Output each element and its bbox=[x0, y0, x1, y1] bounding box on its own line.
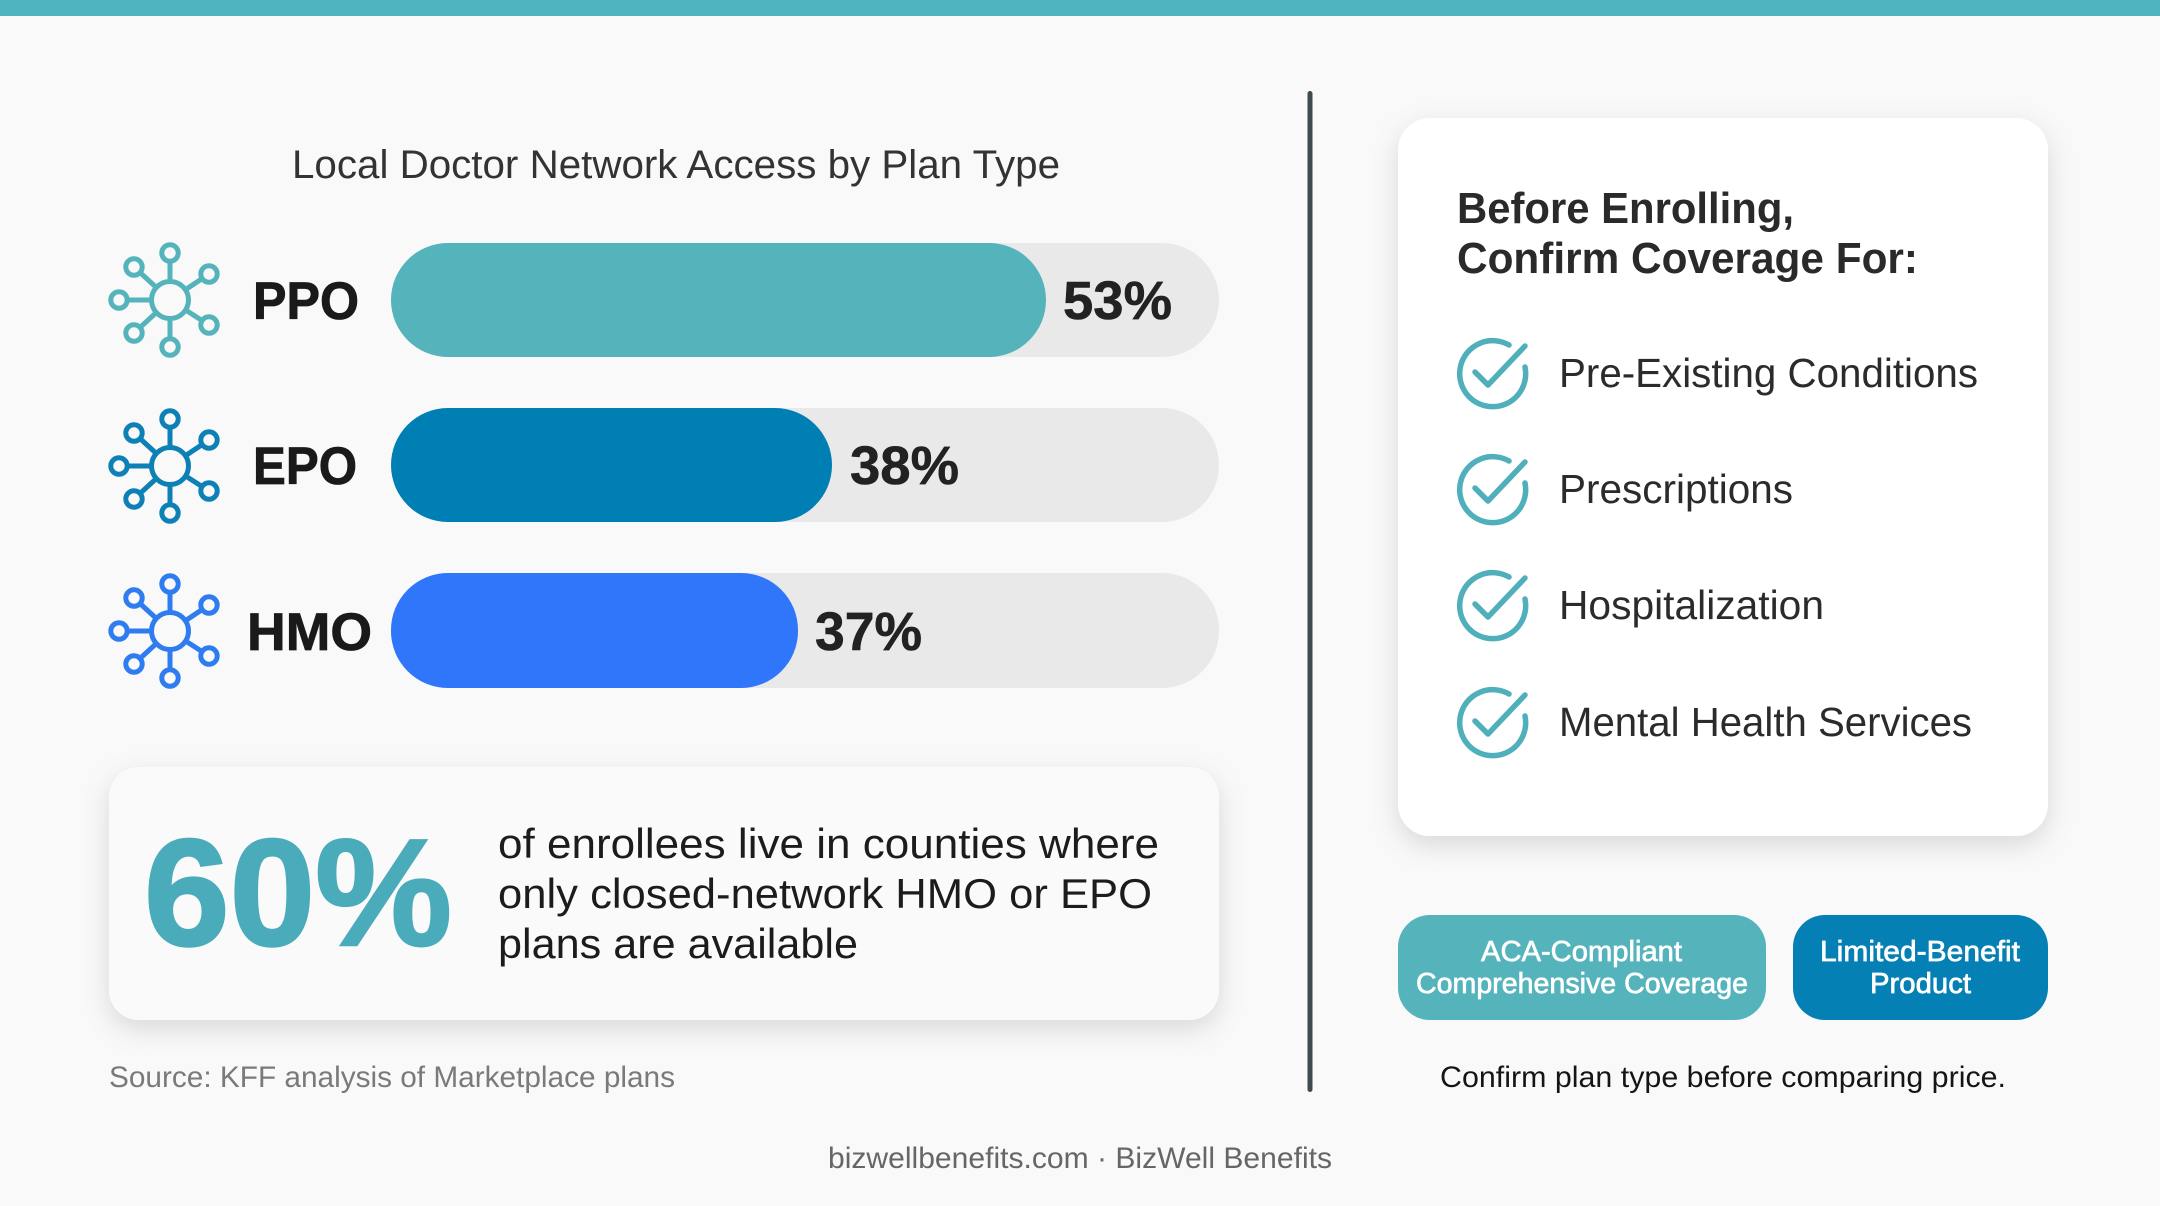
callout text: of enrollees live in counties where bbox=[498, 820, 1159, 867]
badge: ACA-compliant bbox=[1398, 915, 1766, 1020]
reminder note: Confirm plan type before comparing price. bbox=[1440, 1061, 2006, 1094]
row: HMO bbox=[111, 573, 1219, 688]
panel heading: Confirm Coverage For: bbox=[1457, 234, 1918, 283]
badge text bbox=[1416, 936, 1748, 1000]
icon: HMO network bbox=[111, 576, 217, 686]
item: Hospitalization bbox=[1460, 573, 1824, 639]
value: 53%: 53% bbox=[1063, 271, 1172, 331]
item: Mental Health Services bbox=[1460, 690, 1972, 756]
badge text: Comprehensive Coverage bbox=[1416, 968, 1748, 1000]
item: Pre-Existing Conditions bbox=[1460, 341, 1978, 407]
panel background bbox=[1398, 118, 2048, 836]
label: Pre-Existing Conditions bbox=[1559, 350, 1978, 396]
bar fill: EPO 38% bbox=[391, 408, 832, 522]
callout text bbox=[498, 820, 1159, 967]
label: EPO: EPO bbox=[253, 437, 357, 496]
icon: check bbox=[1460, 573, 1526, 639]
chart title: Local Doctor Network Access by Plan Type bbox=[292, 143, 1060, 187]
badge background bbox=[1398, 915, 1766, 1020]
icon: check bbox=[1460, 690, 1526, 756]
value: 38%: 38% bbox=[850, 436, 959, 496]
label: Hospitalization bbox=[1559, 582, 1824, 628]
bar fill: PPO 53% bbox=[391, 243, 1046, 357]
top accent bar bbox=[0, 0, 2160, 16]
badge text: ACA-Compliant bbox=[1481, 936, 1682, 968]
badge text: Limited-Benefit bbox=[1820, 936, 2020, 968]
row: EPO bbox=[111, 408, 1219, 522]
panel heading: Before Enrolling, bbox=[1457, 184, 1794, 233]
icon: EPO network bbox=[111, 411, 217, 521]
label: PPO: PPO bbox=[253, 272, 359, 331]
bar track: HMO bbox=[391, 573, 1219, 688]
badge: limited-benefit bbox=[1793, 915, 2048, 1020]
bar chart: network access by plan type bbox=[111, 243, 1219, 688]
bar track: EPO bbox=[391, 408, 1219, 522]
item: Prescriptions bbox=[1460, 457, 1793, 523]
label: Mental Health Services bbox=[1559, 699, 1972, 745]
callout text: plans are available bbox=[498, 920, 858, 967]
icon: PPO network bbox=[111, 245, 217, 355]
vertical divider bbox=[1308, 91, 1312, 1092]
icon: check bbox=[1460, 457, 1526, 523]
bar fill: HMO 37% bbox=[391, 573, 798, 688]
icon: check bbox=[1460, 341, 1526, 407]
callout background bbox=[109, 767, 1219, 1020]
panel: coverage checklist bbox=[1398, 118, 2048, 836]
callout: 60% statistic bbox=[109, 767, 1219, 1020]
badge background bbox=[1793, 915, 2048, 1020]
callout text: only closed-network HMO or EPO bbox=[498, 870, 1152, 917]
bar track: PPO bbox=[391, 243, 1219, 357]
label: Prescriptions bbox=[1559, 466, 1793, 512]
badge text bbox=[1820, 936, 2020, 1000]
value: 37%: 37% bbox=[815, 602, 922, 662]
panel heading bbox=[1457, 184, 1918, 283]
footer: bizwellbenefits.com · BizWell Benefits bbox=[828, 1142, 1332, 1175]
source note: Source: KFF analysis of Marketplace plans bbox=[109, 1061, 675, 1094]
row: PPO bbox=[111, 243, 1219, 357]
badge text: Product bbox=[1870, 968, 1971, 1000]
label: HMO: HMO bbox=[247, 603, 372, 662]
big number: 60%: 60% bbox=[144, 808, 452, 978]
